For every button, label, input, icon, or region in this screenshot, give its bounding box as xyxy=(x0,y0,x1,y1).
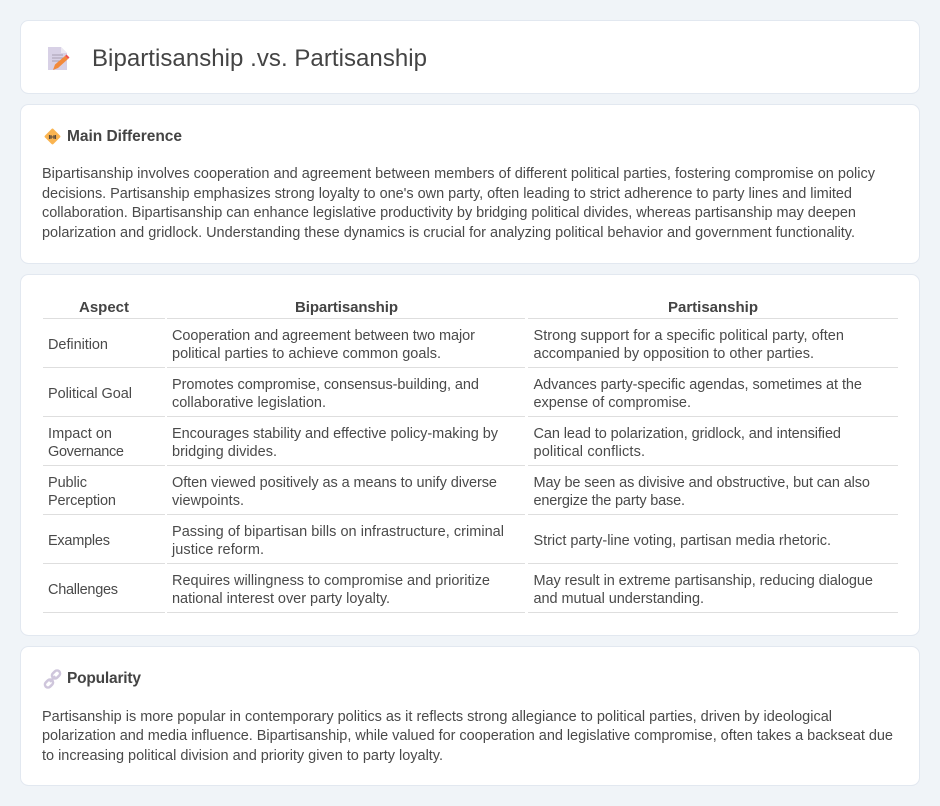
table header: Partisanship xyxy=(668,299,758,316)
panel: popularity xyxy=(20,646,920,786)
panel: header xyxy=(20,20,920,94)
text block: main difference: decisions. Partisanship emphasizes strong loyalty to one's own party, often leading to strict adherence to party lines and limited xyxy=(42,186,852,202)
table row: impact on governance: Governance xyxy=(48,444,124,460)
table row: public perception: Perception xyxy=(48,493,116,509)
text block: main difference: collaboration. Bipartisanship can enhance legislative productivity by bridging political divides, whereas partisanship may deepen xyxy=(42,205,856,221)
table row: examples: Examples xyxy=(48,533,110,549)
table row: challenges: Requires willingness to compromise and prioritize xyxy=(172,573,490,589)
table row: challenges: May result in extreme partisanship, reducing dialogue xyxy=(534,573,873,589)
table header xyxy=(43,299,898,319)
text block: popularity: polarization and media influence. Bipartisanship, while valued for cooperation and legislative compromise, often takes a backseat due xyxy=(42,728,893,744)
icon: warning diamond xyxy=(44,128,61,145)
table row: public perception: May be seen as divisive and obstructive, but can also xyxy=(534,475,870,491)
text block: main difference: polarization and gridlock. Understanding these dynamics is crucial for analyzing political behavior and government functionality. xyxy=(42,225,855,241)
table row: impact on governance xyxy=(43,426,898,466)
panel: comparison table xyxy=(20,274,920,636)
table row: definition: accompanied by opposition to other parties. xyxy=(534,346,814,362)
table row: impact on governance: Impact on xyxy=(48,426,112,442)
title: Bipartisanship .vs. Partisanship xyxy=(92,45,427,72)
table row: definition: political parties to achieve common goals. xyxy=(172,346,441,362)
icon: document with pencil xyxy=(48,47,70,70)
text block: popularity: Partisanship is more popular in contemporary politics as it reflects strong allegiance to political parties, driven by ideological xyxy=(42,709,832,725)
table row: examples: justice reform. xyxy=(171,542,264,558)
table row: examples: Passing of bipartisan bills on infrastructure, criminal xyxy=(172,524,504,540)
table row: public perception: Public xyxy=(48,475,87,491)
table row: public perception: Often viewed positively as a means to unify diverse xyxy=(172,475,497,491)
table row: impact on governance: Can lead to polarization, gridlock, and intensified xyxy=(534,426,841,442)
text block: popularity xyxy=(42,709,893,764)
table row: impact on governance: bridging divides. xyxy=(172,444,277,460)
table row: challenges xyxy=(43,573,898,613)
table row: challenges: and mutual understanding. xyxy=(534,591,704,607)
table header: Aspect xyxy=(79,299,129,316)
table row: political goal: collaborative legislation. xyxy=(172,395,326,411)
table row: definition: Definition xyxy=(48,337,108,353)
table row: public perception: viewpoints. xyxy=(172,493,244,509)
table row: definition: Cooperation and agreement between two major xyxy=(172,328,475,344)
table row: political goal: Political Goal xyxy=(48,386,132,402)
table row: definition xyxy=(43,328,898,368)
table row: political goal xyxy=(43,377,898,417)
table header: Bipartisanship xyxy=(295,299,398,316)
icon: chain link xyxy=(44,669,61,689)
table row: challenges: Challenges xyxy=(48,582,118,598)
table row: political goal: Advances party-specific agendas, sometimes at the xyxy=(534,377,862,393)
table row: impact on governance: Encourages stability and effective policy-making by xyxy=(172,426,499,442)
table row: impact on governance: political conflicts. xyxy=(534,444,645,460)
table row: political goal: expense of compromise. xyxy=(534,395,691,411)
table row: public perception xyxy=(43,475,898,515)
table row: definition: Strong support for a specific political party, often xyxy=(534,328,844,344)
table row: political goal: Promotes compromise, consensus-building, and xyxy=(172,377,479,393)
panel: main difference xyxy=(20,104,920,264)
table row: public perception: energize the party base. xyxy=(534,493,685,509)
table row: examples xyxy=(43,524,898,564)
table row: examples: Strict party-line voting, partisan media rhetoric. xyxy=(534,533,831,549)
text block: main difference xyxy=(42,166,876,241)
text block: popularity: to increasing political division and priority given to party loyalty. xyxy=(42,748,443,764)
table row: challenges: national interest over party loyalty. xyxy=(172,591,390,607)
heading: main difference: Main Difference xyxy=(67,128,182,145)
text block: main difference: Bipartisanship involves cooperation and agreement between members of different political parties, fostering compromise on policy xyxy=(42,166,876,182)
heading: popularity: Popularity xyxy=(67,670,141,687)
